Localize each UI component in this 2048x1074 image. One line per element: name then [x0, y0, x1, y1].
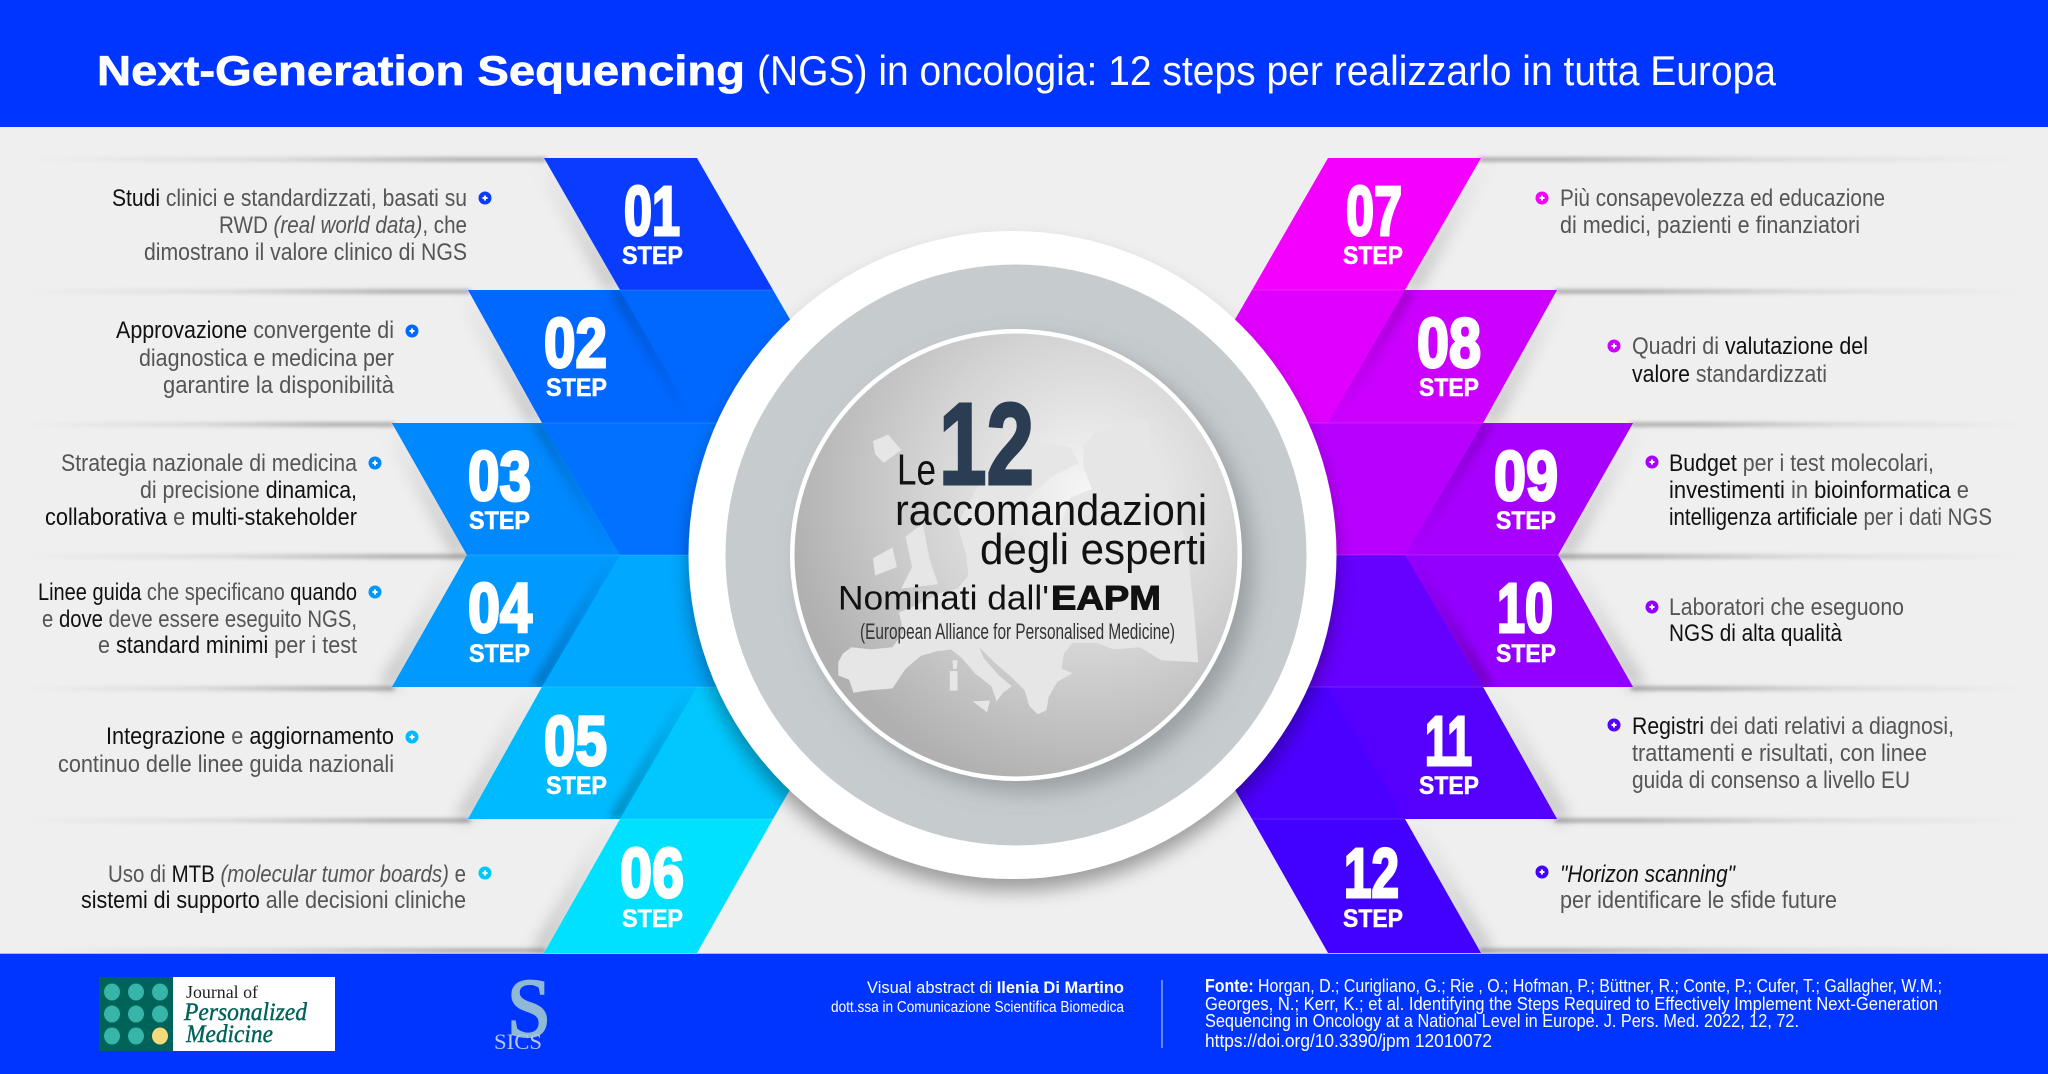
step 10	[1496, 569, 1904, 668]
text step 09: investimenti in bioinformatica e	[1669, 477, 1969, 504]
bullet 02	[406, 324, 418, 338]
text step 03: collaborativa e multi-stakeholder	[45, 504, 357, 531]
step 01: 01	[624, 172, 680, 250]
center heading: EAPM	[1051, 580, 1161, 618]
step 12: 12	[1344, 834, 1399, 912]
step 12	[1343, 834, 1837, 933]
step 01	[112, 172, 683, 270]
text step 08: Quadri di valutazione del	[1632, 333, 1868, 360]
visual abstract credit	[831, 978, 1124, 1016]
step 11: STEP	[1419, 772, 1479, 800]
logo: Journal of Personalized Medicine: Journal of	[186, 982, 258, 1002]
bullet 03	[368, 456, 382, 470]
text step 07: Più consapevolezza ed educazione	[1560, 185, 1885, 212]
text step 12: per identificare le sfide future	[1560, 887, 1837, 914]
text step 04: e dove deve essere eseguito NGS,	[42, 606, 357, 633]
step 07	[1343, 172, 1885, 270]
bullet 04	[368, 586, 382, 598]
text step 11: guida di consenso a livello EU	[1632, 767, 1910, 794]
right chevron ribbons	[1235, 158, 1633, 953]
visual abstract credit: Visual abstract di Ilenia Di Martino	[867, 978, 1124, 997]
bullet 11	[1608, 718, 1620, 732]
step 10: 10	[1497, 569, 1553, 647]
text step 06: sistemi di supporto alle decisioni cliniche	[81, 887, 466, 914]
text step 11: Registri dei dati relativi a diagnosi,	[1632, 713, 1954, 740]
step 08: 08	[1417, 304, 1481, 382]
text step 10: NGS di alta qualità	[1669, 620, 1843, 647]
right ribbon shadows on background	[1405, 158, 2048, 953]
step 03	[45, 437, 531, 535]
step 03: STEP	[469, 507, 530, 535]
bullet 07	[1536, 192, 1548, 204]
logo: Journal of Personalized Medicine: Medicine	[185, 1021, 273, 1048]
text step 12: "Horizon scanning"	[1560, 861, 1736, 888]
text step 01: dimostrano il valore clinico di NGS	[144, 239, 467, 266]
text step 01: Studi clinici e standardizzati, basati su	[112, 185, 467, 212]
center heading: 12	[939, 379, 1034, 509]
step 07: STEP	[1343, 242, 1403, 270]
text step 02: Approvazione convergente di	[116, 317, 394, 344]
text step 01	[112, 185, 467, 266]
logo: Journal of Personalized Medicine	[99, 977, 335, 1051]
text step 05	[58, 723, 394, 778]
text step 04	[38, 579, 357, 659]
source citation	[1205, 976, 1942, 1051]
step 08: STEP	[1419, 374, 1479, 402]
title	[97, 47, 1777, 94]
text step 11	[1632, 713, 1954, 794]
text step 07: di medici, pazienti e finanziatori	[1560, 212, 1860, 239]
logo: SICS: S	[507, 962, 551, 1055]
step 05: STEP	[546, 772, 607, 800]
header banner	[0, 0, 2048, 127]
text step 07	[1560, 185, 1885, 239]
source citation: Fonte: Horgan, D.; Curigliano, G.; Rie , O.; Hofman, P.; Büttner, R.; Conte, P.; Cufer, T.; Gallagher, W.M.;	[1205, 976, 1942, 996]
step 03: 03	[468, 437, 531, 515]
text step 04: Linee guida che specificano quando	[38, 579, 357, 606]
text step 11: trattamenti e risultati, con linee	[1632, 740, 1927, 767]
bullet 09	[1646, 456, 1658, 468]
bullet 06	[478, 866, 492, 880]
center heading: degli esperti	[980, 525, 1207, 574]
logo: Journal of Personalized Medicine: Personalized	[183, 999, 307, 1026]
bullet 08	[1608, 340, 1620, 352]
bullet 10	[1646, 600, 1658, 614]
text step 02	[116, 317, 395, 399]
step 04	[38, 569, 532, 668]
text step 06: Uso di MTB (molecular tumor boards) e	[108, 861, 466, 888]
step 08	[1417, 304, 1868, 402]
text step 04: e standard minimi per i test	[98, 632, 357, 659]
step 09: STEP	[1496, 507, 1556, 535]
step 05	[58, 702, 607, 800]
step 06	[81, 834, 684, 933]
step 11: 11	[1425, 702, 1472, 780]
bullet 12	[1536, 866, 1548, 878]
step 11	[1419, 702, 1954, 800]
bullet 01	[478, 192, 492, 204]
center heading: Le	[897, 446, 936, 494]
center heading	[838, 379, 1207, 644]
text step 02: diagnostica e medicina per	[139, 345, 394, 372]
step 02: 02	[544, 304, 607, 382]
center heading: Nominati dall'	[838, 580, 1049, 618]
step 06: STEP	[622, 905, 683, 933]
step 02	[116, 304, 607, 402]
step 10: STEP	[1496, 640, 1556, 668]
text step 12	[1560, 861, 1837, 914]
step 06: 06	[620, 834, 684, 912]
text step 06	[81, 861, 466, 914]
step 12: STEP	[1343, 905, 1403, 933]
title: Next-Generation Sequencing	[97, 47, 745, 94]
text step 10	[1669, 594, 1904, 647]
text step 02: garantire la disponibilità	[163, 372, 395, 399]
left chevron ribbons	[392, 158, 790, 953]
step 01: STEP	[622, 242, 683, 270]
visual abstract credit: dott.ssa in Comunicazione Scientifica Biomedica	[831, 999, 1124, 1016]
text step 05: continuo delle linee guida nazionali	[58, 751, 394, 778]
text step 09: Budget per i test molecolari,	[1669, 450, 1934, 477]
source citation: Georges, N.; Kerr, K.; et al. Identifying the Steps Required to Effectively Implement Next-Generation	[1205, 994, 1938, 1014]
text step 03	[45, 450, 358, 531]
map of Europe	[838, 419, 1198, 714]
step 02: STEP	[546, 374, 607, 402]
text step 03: di precisione dinamica,	[140, 477, 357, 504]
bullet 05	[406, 730, 418, 744]
text step 05: Integrazione e aggiornamento	[106, 723, 394, 750]
left ribbon shadows on background	[0, 158, 620, 953]
footer banner	[0, 953, 2048, 1074]
center heading: raccomandazioni	[895, 486, 1207, 535]
text step 08	[1632, 333, 1868, 388]
step 07: 07	[1346, 172, 1402, 250]
step 04: STEP	[469, 640, 530, 668]
step 05: 05	[544, 702, 607, 780]
text step 08: valore standardizzati	[1632, 361, 1827, 388]
step 09: 09	[1494, 437, 1558, 515]
central badge	[688, 231, 1336, 879]
text step 01: RWD (real world data), che	[219, 212, 467, 239]
text step 03: Strategia nazionale di medicina	[61, 450, 358, 477]
text step 09: intelligenza artificiale per i dati NGS	[1669, 504, 1992, 531]
source citation: https://doi.org/10.3390/jpm 12010072	[1205, 1031, 1492, 1051]
text step 09	[1669, 450, 1992, 531]
logo: SICS: SICS	[494, 1029, 542, 1054]
step 04: 04	[468, 569, 532, 647]
center heading: (European Alliance for Personalised Medicine)	[860, 619, 1175, 644]
text step 10: Laboratori che eseguono	[1669, 594, 1904, 621]
step 09	[1494, 437, 1992, 535]
title: (NGS) in oncologia: 12 steps per realizzarlo in tutta Europa	[757, 47, 1777, 94]
source citation: Sequencing in Oncology at a National Level in Europe. J. Pers. Med. 2022, 12, 72.	[1205, 1011, 1799, 1031]
